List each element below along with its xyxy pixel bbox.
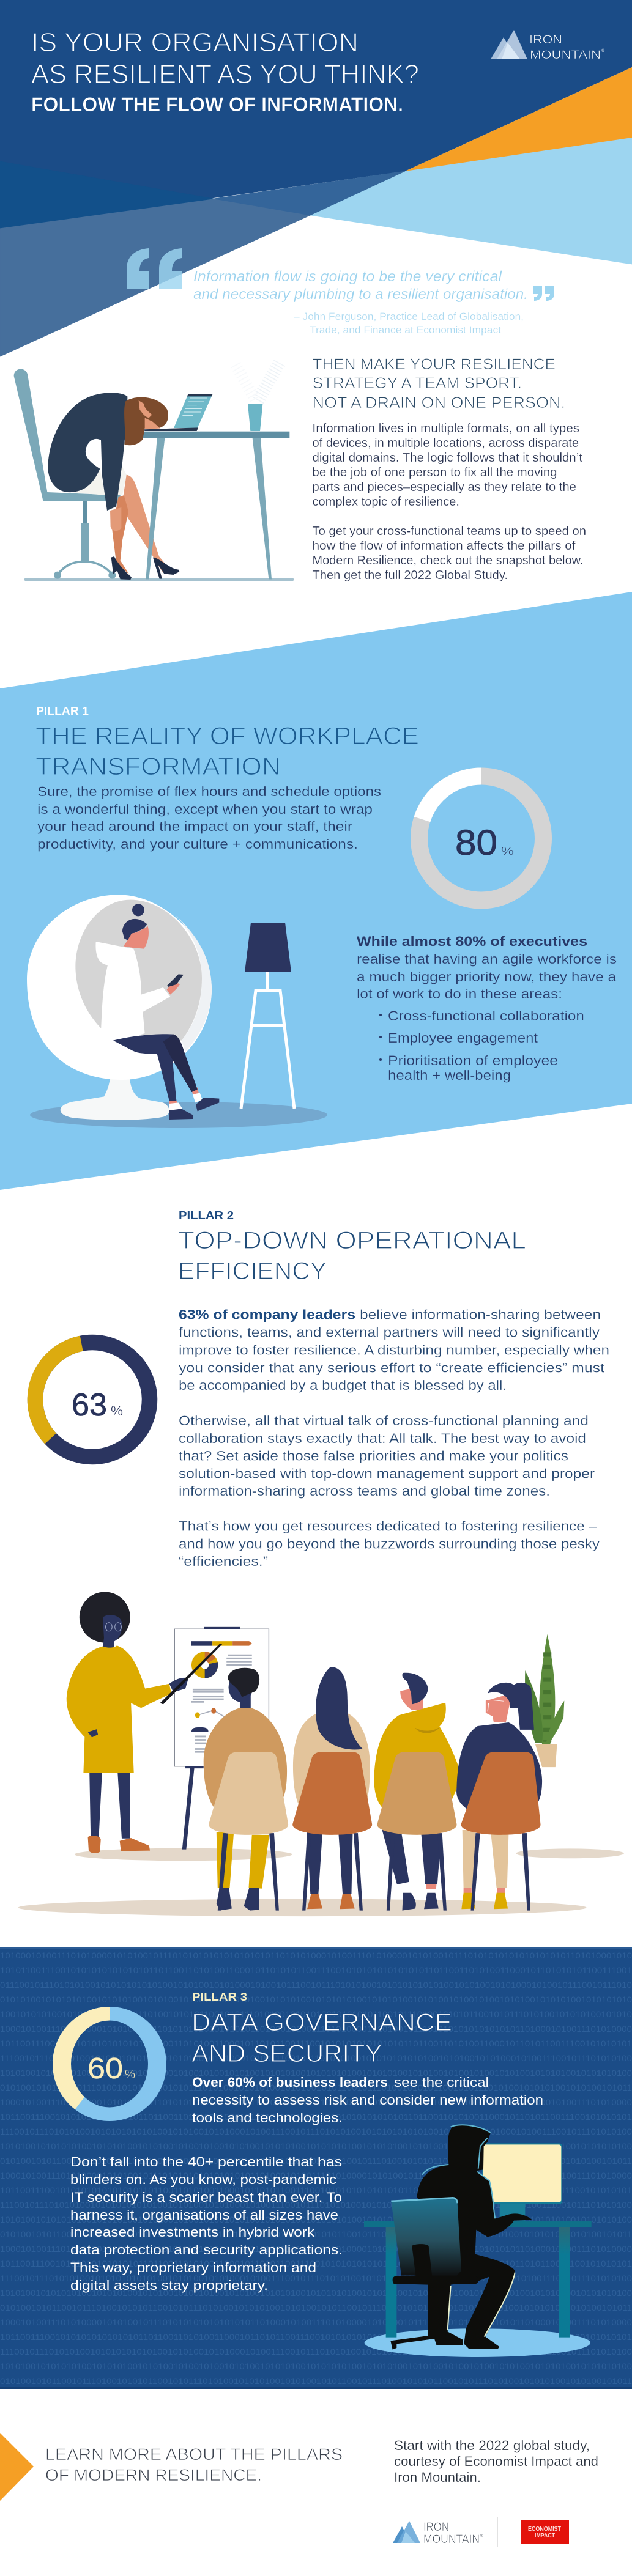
body text: information-sharing across teams and global time zones. — [179, 1483, 550, 1499]
title: AS RESILIENT AS YOU THINK? — [31, 59, 419, 89]
background binary digits: 1001010101001010101011001011101001010101100101011101010010101010010101010110010111010010101011001010111010100101010100101010 — [0, 2009, 632, 2019]
body text: 63% of company leaders — [179, 1307, 355, 1322]
background binary digits: 0101001010110010111010010101011001010111010100101010100101010010101100101110100101010110010101110101001010101001010100101011 — [0, 2229, 632, 2239]
panel: pillar 2 — [18, 1209, 624, 1916]
logo: Iron Mountain header: MOUNTAIN — [530, 49, 601, 62]
body text: digital assets stay proprietary. — [70, 2278, 268, 2293]
body text: increased investments in hybrid work — [70, 2224, 315, 2240]
floor — [24, 578, 294, 581]
body text: lot of work to do in these areas: — [357, 986, 562, 1002]
body text: solution-based with top-down management support and proper — [179, 1466, 595, 1482]
body text: collaboration stays exactly that: All talk. The best way to avoid — [179, 1431, 586, 1446]
heading: TOP-DOWN OPERATIONAL — [178, 1227, 526, 1254]
body text: how the flow of information affects the pillars of — [312, 539, 576, 553]
background binary digits: 1010110011100101010101010101011011001101010011000101101010110011100101010101010101011011001101010011000101101010101100111001 — [0, 1965, 632, 1975]
icon: orange chevron — [0, 2433, 34, 2501]
background binary digits: 0101010010101010100101010100101010010100101001010100101010100101010101001010101001010100101001010010101001010101001010101010 — [0, 1995, 632, 2004]
body text: Sure, the promise of flex hours and schedule options — [37, 784, 381, 799]
background binary digits: 1000101001110101000010101001011101010101010101010110100010100111010100001010100101110101010101010101011010001010011101010000 — [0, 2171, 632, 2180]
panel: pillar 1 — [0, 592, 632, 1190]
body text — [312, 422, 586, 582]
illustration: woman in egg chair with lamp — [27, 895, 327, 1128]
illustration: exhausted woman at desk — [14, 363, 294, 581]
illustration: presentation to seated team — [18, 1592, 624, 1916]
chair — [14, 369, 121, 579]
logo: Iron Mountain footer: IRON — [423, 2521, 449, 2534]
laptop — [143, 394, 212, 431]
body text: your head around the impact on your staff, their — [37, 819, 352, 834]
pillar label: PILLAR 3 — [192, 1991, 247, 2003]
floor shadows — [18, 1848, 624, 1916]
heading — [45, 2445, 343, 2484]
bullet list — [379, 1008, 584, 1083]
background binary digits: 1000101001110101000010101001011101010101010101010110100010100111010100001010100101110101010101010101011010001010011101010000 — [0, 2097, 632, 2107]
bullet list: health + well-being — [388, 1068, 511, 1083]
intro text: Over 60% of business leaders — [192, 2075, 388, 2090]
logo: Iron Mountain footer: ® — [480, 2534, 483, 2538]
body text — [179, 1307, 609, 1569]
title — [31, 28, 419, 116]
quote text: and necessary plumbing to a resilient organisation. — [193, 286, 528, 303]
body text: Then get the full 2022 Global Study. — [312, 569, 508, 582]
body text: that? Set aside those false priorities and make your politics — [179, 1449, 568, 1464]
donut chart: 63% — [35, 1343, 149, 1456]
background binary digits: 1000101001110101000010101001011101010101010101010110100010100111010100001010100101110101010101010101011010001010011101010000 — [0, 2244, 632, 2254]
heading: OF MODERN RESILIENCE. — [45, 2466, 262, 2484]
body text — [37, 784, 381, 852]
logo: Iron Mountain header — [491, 30, 605, 62]
desk plant — [234, 363, 280, 431]
body text: Otherwise, all that virtual talk of cross-functional planning and — [179, 1413, 589, 1428]
header background shapes — [0, 0, 632, 356]
seated person 1 — [204, 1668, 288, 1911]
donut chart: 63%: % — [111, 1403, 123, 1419]
title: IS YOUR ORGANISATION — [31, 28, 359, 57]
quote text: Information flow is going to be the very critical — [193, 268, 502, 285]
body text: “efficiencies.” — [179, 1554, 268, 1569]
background binary digits: 1110010111010101001010101010101001010100101010001010011100101110101010010101010101010010101001010100010100111001011101010100 — [0, 2200, 632, 2210]
logo: Economist Impact — [521, 2520, 569, 2544]
donut chart: 80%: 80 — [455, 823, 497, 863]
floor ellipse — [365, 2328, 590, 2357]
pillar label: PILLAR 1 — [36, 705, 89, 717]
desk — [364, 2221, 592, 2338]
heading — [178, 1227, 526, 1285]
seated person 2 — [292, 1667, 372, 1911]
background binary digits: 0111001011101010100101010101010100101010010101000101001011100101110101010010101010101010010101001010100010100101110010111010 — [0, 1980, 632, 1990]
body text: parts and pieces–especially as they relate to the — [312, 481, 576, 494]
body text: IT security is a scarier beast than ever. To — [70, 2190, 342, 2205]
desk — [143, 432, 289, 579]
hair and face — [124, 397, 168, 445]
body text: is a wonderful thing, except when you start to wrap — [37, 802, 373, 817]
heading: STRATEGY A TEAM SPORT. — [312, 375, 522, 392]
panel: call to action — [0, 2433, 598, 2547]
bullet list: Cross-functional collaboration — [388, 1008, 584, 1024]
background binary digits: 1011001110010101010101010101101100110101001100010110101100111001010101010101010110110011010100110001011010110011100101010101 — [0, 2112, 632, 2122]
floor shadow — [30, 1102, 327, 1128]
heading: THEN MAKE YOUR RESILIENCE — [312, 356, 556, 373]
donut chart: 63%: 63 — [72, 1387, 107, 1423]
background binary digits: 1110010111010101001010101010101001010100101010001010011100101110101010010101010101010010101001010100010100111001011101010100 — [0, 2273, 632, 2283]
seated person 4 — [456, 1683, 542, 1911]
body text: courtesy of Economist Impact and — [394, 2454, 598, 2469]
background binary digits: 1011001110010101010101010101101100110101001100010110101100111001010101010101010110110011010100110001011010110011100101010101 — [0, 2332, 632, 2342]
seated person 3 — [374, 1673, 461, 1911]
logo: Economist Impact: ECONOMIST — [528, 2526, 561, 2533]
background binary digits — [0, 1950, 632, 2386]
body text — [357, 934, 617, 1002]
bullet list: Prioritisation of employee — [388, 1053, 558, 1068]
background binary digits: 1110010111010101001010101010101001010100101010001010011100101110101010010101010101010010101001010100010100111001011101010100 — [0, 2347, 632, 2356]
background binary digits: 0101001010110010111010010101011001010111010100101010100101010010101100101110100101010110010101110101001010101001010100101011 — [0, 2156, 632, 2166]
body text: realise that having an agile workforce is — [357, 951, 617, 967]
seated woman — [95, 904, 219, 1120]
donut chart: 80% — [419, 777, 543, 900]
heading: THE REALITY OF WORKPLACE — [35, 723, 419, 750]
body text: blinders on. As you know, post-pandemic — [70, 2172, 336, 2187]
logo: Iron Mountain footer: MOUNTAIN — [423, 2533, 480, 2546]
illustration: hooded figure at computer — [364, 2125, 592, 2357]
body text: Start with the 2022 global study, — [394, 2438, 590, 2453]
body text: complex topic of resilience. — [312, 495, 459, 509]
body text: functions, teams, and external partners will need to significantly — [179, 1324, 600, 1340]
background binary digits: 1010100101010101001010101001010100101001010010101001010101001010101010010101010010101001010010100101010010101010010101010100 — [0, 2141, 632, 2151]
logo: Iron Mountain header: ® — [601, 48, 605, 53]
intro text: necessity to assess risk and consider new information — [192, 2092, 543, 2108]
donut chart: 60%: 60 — [87, 2053, 123, 2085]
bullet list: Employee engagement — [388, 1030, 538, 1046]
quote — [127, 248, 554, 336]
background binary digits: 1010100101010101001010101001010100101001010010101001010101001010101010010101010010101001010010100101010010101010010101010100 — [0, 2361, 632, 2371]
body text: Don’t fall into the 40+ percentile that has — [70, 2154, 342, 2169]
body text: Information lives in multiple formats, on all types — [312, 422, 579, 435]
body text: be the job of one person to fix all the moving — [312, 466, 557, 479]
heading: LEARN MORE ABOUT THE PILLARS — [45, 2445, 343, 2463]
body text: improve to foster resilience. A disturbing number, especially when — [179, 1343, 609, 1357]
background binary digits: 1110010111010101001010101010101001010100101010001010011100101110101010010101010101010010101001010100010100111001011101010100 — [0, 2127, 632, 2136]
background binary digits: 1011001110010101010101010101101100110101001100010110101100111001010101010101010110110011010100110001011010110011100101010101 — [0, 2039, 632, 2048]
background binary digits: 0101001010110010111010010101011001010111010100101010100101010010101100101110100101010110010101110101001010101001010100101011 — [0, 2083, 632, 2092]
logo: Iron Mountain footer — [393, 2521, 483, 2546]
body text: data protection and security applications. — [70, 2242, 343, 2257]
body text: While almost 80% of executives — [357, 934, 587, 949]
logo: Iron Mountain header: IRON — [529, 34, 562, 46]
skirt — [72, 463, 127, 495]
quote text — [193, 268, 528, 303]
donut chart: 60%: % — [125, 2068, 135, 2081]
body text: To get your cross-functional teams up to speed on — [312, 525, 586, 538]
body text: Iron Mountain. — [394, 2470, 481, 2485]
heading — [35, 723, 419, 780]
logo: Economist Impact: IMPACT — [535, 2533, 555, 2539]
body text — [394, 2438, 598, 2485]
heading: AND SECURITY — [191, 2040, 382, 2067]
quote attribution: – John Ferguson, Practice Lead of Globalisation, — [294, 311, 524, 322]
panel: team sport intro — [312, 356, 586, 582]
intro text — [192, 2075, 543, 2125]
body text: productivity, and your culture + communications. — [37, 836, 358, 852]
body text: a much bigger priority now, they have a — [357, 969, 617, 984]
background binary digits: 0101001010110010111010010101011001010111010100101010100101010010101100101110100101010110010101110101001010101001010100101011 — [0, 2303, 632, 2312]
heading: EFFICIENCY — [178, 1258, 327, 1285]
hooded figure — [390, 2125, 532, 2350]
monitor — [482, 2143, 562, 2221]
body text: be accompanied by a budget that is blessed by all. — [179, 1378, 507, 1393]
plant — [525, 1634, 564, 1767]
title: FOLLOW THE FLOW OF INFORMATION. — [31, 94, 403, 116]
quote attribution — [294, 311, 524, 336]
quote attribution: Trade, and Finance at Economist Impact — [310, 324, 501, 336]
pillar label: PILLAR 2 — [179, 1209, 234, 1222]
background binary digits: 1011001110010101010101010101101100110101001100010110101100111001010101010101010110110011010100110001011010110011100101010101 — [0, 2259, 632, 2268]
egg chair — [27, 895, 212, 1120]
background binary digits: 1010100101010101001010101001010100101001010010101001010101001010101010010101010010101001010010100101010010101010010101010100 — [0, 2215, 632, 2224]
heading: TRANSFORMATION — [35, 753, 281, 780]
background binary digits: 0101001010110010111010010101011001010111010100101010100101010010101100101110100101010110010101110101001010101001010100101011 — [0, 2376, 632, 2386]
body text: of devices, in multiple locations, across disparate — [312, 437, 579, 450]
panel: pillar 3 — [0, 1947, 632, 2389]
floor lamp — [241, 923, 294, 1109]
legs and shoes — [110, 475, 179, 580]
body text: harness it, organisations of all sizes have — [70, 2207, 338, 2223]
body text: That’s how you get resources dedicated to fostering resilience – — [179, 1519, 598, 1534]
donut chart: 60% — [53, 2007, 166, 2121]
body text: This way, proprietary information and — [70, 2260, 316, 2275]
intro text: see the critical — [394, 2075, 489, 2090]
icon: closing quotation mark — [533, 286, 554, 301]
background binary digits: 1000101001110101000010101001011101010101010101010110100010100111010100001010100101110101010101010101011010001010011101010000 — [0, 2024, 632, 2034]
icon: opening quotation mark — [127, 248, 182, 289]
body text: digital domains. The logic follows that it shouldn’t — [312, 451, 582, 465]
body text — [70, 2154, 343, 2293]
body text: and how you go beyond the buzzwords surrounding those pesky — [179, 1537, 600, 1552]
intro text: tools and technologies. — [192, 2110, 343, 2125]
donut chart: 80%: % — [501, 845, 514, 857]
presenter — [67, 1592, 223, 1853]
background binary digits: 1110010111010101001010101010101001010100101010001010011100101110101010010101010101010010101001010100010100111001011101010100 — [0, 2053, 632, 2063]
heading: DATA GOVERNANCE — [191, 2009, 452, 2036]
office chair back — [391, 2198, 478, 2284]
background binary digits: 1010100101010101001010101001010100101001010010101001010101001010101010010101010010101001010010100101010010101010010101010100 — [0, 2068, 632, 2078]
heading — [191, 2009, 452, 2067]
background binary digits: 1010100101010101001010101001010100101001010010101001010101001010101010010101010010101001010010100101010010101010010101010100 — [0, 2288, 632, 2298]
jacket — [48, 393, 127, 511]
background binary digits: 1010001010011101010000101010010111010101010101010101011010101000101001110101000010101001011101010101010101010101101010001010 — [0, 1950, 632, 1960]
background binary digits: 1011001110010101010101010101101100110101001100010110101100111001010101010101010110110011010100110001011010110011100101010101 — [0, 2185, 632, 2195]
background binary digits: 1000101001110101000010101001011101010101010101010110100010100111010100001010100101110101010101010101011010001010011101010000 — [0, 2317, 632, 2327]
body text: believe information-sharing between — [360, 1307, 601, 1322]
heading — [312, 356, 565, 411]
body text: Modern Resilience, check out the snapshot below. — [312, 554, 584, 567]
body text: you consider that any serious effort to “create efficiencies” must — [179, 1360, 604, 1376]
heading: NOT A DRAIN ON ONE PERSON. — [312, 394, 565, 411]
presentation board — [174, 1627, 269, 1850]
